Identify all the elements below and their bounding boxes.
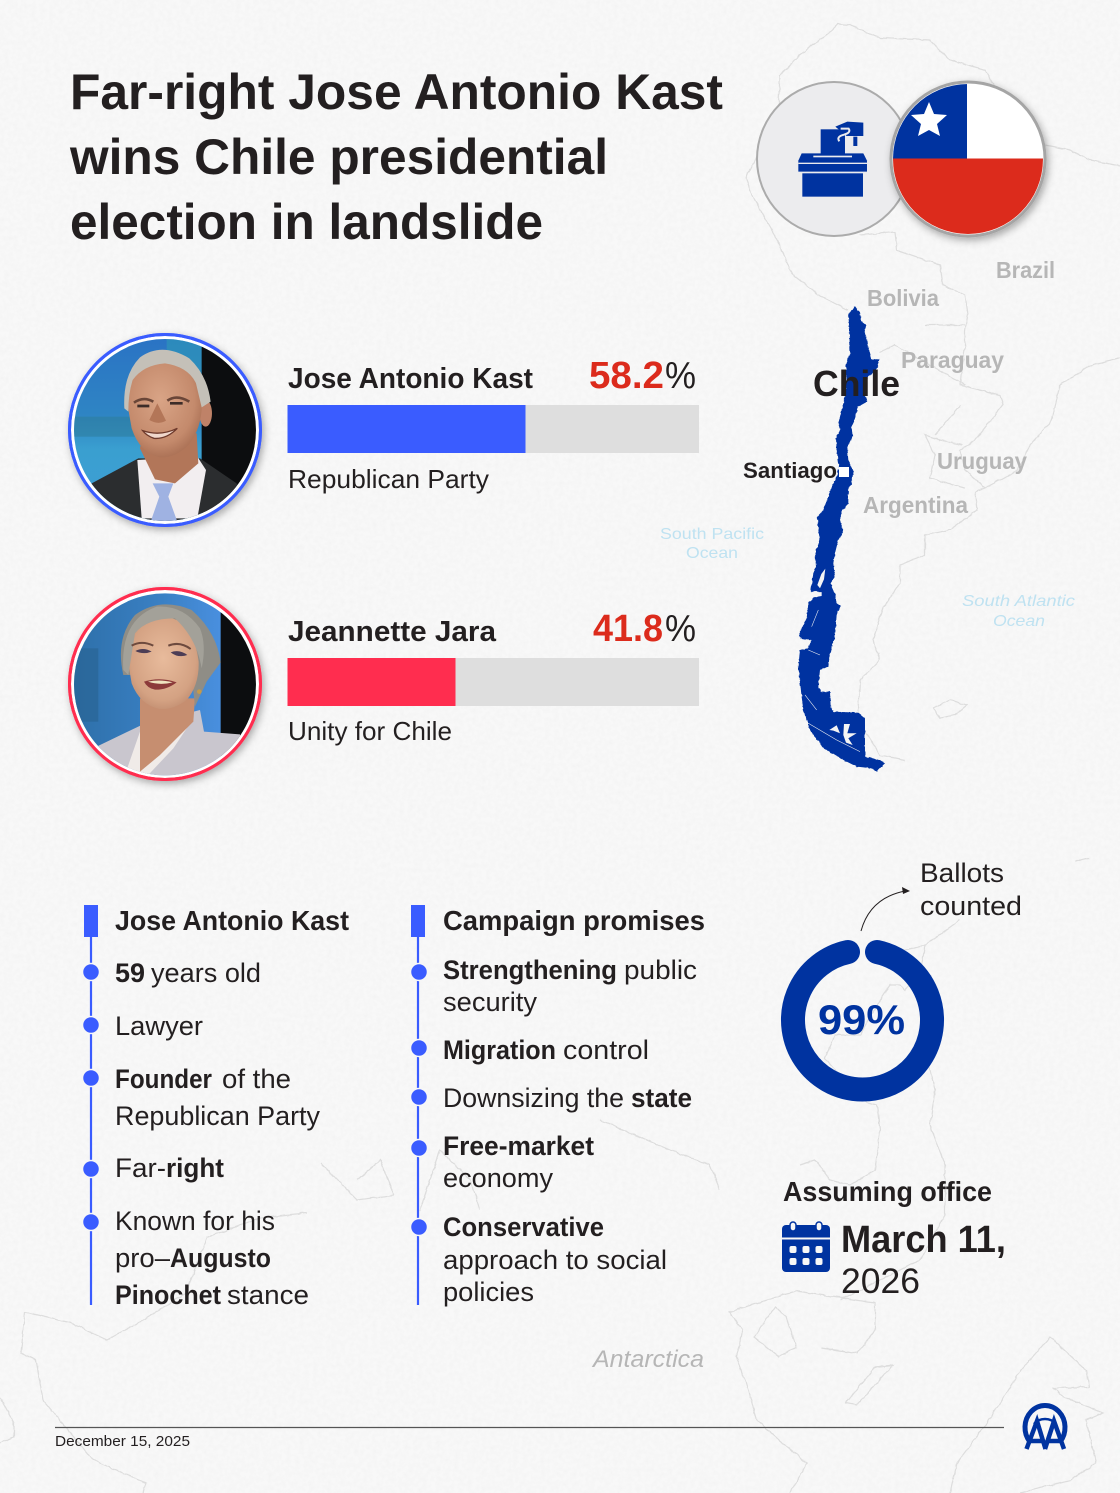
date: March 11, 2026: 2026 (841, 1262, 920, 1301)
candidate result: Jeannette Jara: Jeannette Jara (288, 616, 497, 648)
panel: Kast profile timeline: Republican Party (115, 1101, 320, 1131)
panel: Kast profile timeline: stance (227, 1280, 309, 1310)
callout: ballots counted label (920, 858, 1022, 921)
map labels: oceans: South Pacific (660, 526, 764, 543)
title (69, 64, 723, 250)
title: election in landslide (70, 194, 543, 250)
map labels: oceans (660, 526, 1075, 630)
panel: Kast profile timeline: Lawyer (115, 1011, 203, 1041)
panel: campaign promises timeline: policies (443, 1277, 534, 1307)
panel: Kast profile timeline: Known for his (115, 1206, 275, 1236)
icon: Chilean flag (890, 80, 1046, 238)
panel: campaign promises timeline: economy (443, 1163, 553, 1193)
callout: ballots counted label: Ballots (920, 858, 1004, 888)
map: Chile (798, 307, 885, 772)
panel: campaign promises timeline: Migration (443, 1035, 556, 1065)
candidate result: Jose Antonio Kast (288, 355, 699, 494)
panel: Kast profile timeline (82, 905, 349, 1310)
panel: campaign promises timeline: approach to social (443, 1245, 667, 1275)
panel: campaign promises timeline: Strengthening (443, 955, 617, 985)
map label: Antarctica: Antarctica (591, 1346, 704, 1373)
title: Far-right Jose Antonio Kast (70, 64, 723, 120)
portrait: Jose Antonio Kast (70, 333, 262, 533)
panel: Kast profile timeline: years old (151, 958, 261, 988)
panel: campaign promises timeline: Campaign promises (443, 905, 705, 936)
panel: Kast profile timeline: 59 (115, 958, 145, 988)
map labels: oceans: Ocean (686, 545, 738, 562)
panel: Kast profile timeline: Pinochet (115, 1280, 221, 1310)
map labels: oceans: Ocean (993, 613, 1045, 630)
panel: campaign promises timeline (410, 905, 705, 1307)
heading: assuming office: Assuming office (783, 1176, 992, 1207)
map labels: countries: Brazil (996, 257, 1055, 283)
panel: Kast profile timeline: pro– (115, 1243, 170, 1273)
panel: campaign promises timeline: state (631, 1083, 692, 1113)
panel: campaign promises timeline: control (563, 1035, 649, 1065)
date: March 11, 2026 (841, 1219, 1006, 1301)
candidate result: Jeannette Jara (288, 608, 699, 746)
panel: campaign promises timeline: security (443, 987, 537, 1017)
panel: Kast profile timeline: Far- (115, 1153, 166, 1183)
candidate result: Jeannette Jara: 41.8 (593, 608, 663, 650)
icon: calendar (782, 1222, 830, 1272)
map labels: countries: Uruguay (937, 448, 1027, 474)
panel: campaign promises timeline: Conservative (443, 1212, 604, 1242)
candidate result: Jose Antonio Kast: % (665, 355, 696, 397)
date: March 11, 2026: March 11, (841, 1219, 1006, 1261)
title: wins Chile presidential (69, 129, 608, 185)
logo: Anadolu Agency AA (1025, 1405, 1065, 1449)
map labels: oceans: South Atlantic (962, 593, 1075, 610)
panel: Kast profile timeline: of the (222, 1064, 291, 1094)
panel: Kast profile timeline: Founder (115, 1064, 212, 1094)
map labels: countries: Paraguay (901, 347, 1004, 373)
panel: campaign promises timeline: Downsizing the (443, 1083, 624, 1113)
map label: Santiago: Santiago (743, 458, 837, 483)
candidate result: Jose Antonio Kast: Jose Antonio Kast (288, 363, 533, 395)
icon: ballot box in circle (757, 82, 911, 236)
panel: campaign promises timeline: public (624, 955, 697, 985)
donut chart: 99 percent ballots counted (793, 952, 932, 1089)
donut chart: 99 percent ballots counted: 99% (818, 996, 905, 1043)
map labels: countries (863, 257, 1055, 518)
map labels: countries: Argentina (863, 492, 968, 518)
map labels: countries: Bolivia (867, 285, 939, 311)
panel: Kast profile timeline: Jose Antonio Kast (115, 905, 349, 936)
arrow: from donut to ballots label (861, 887, 910, 931)
map label: Chile: Chile (813, 363, 900, 404)
portrait: Jeannette Jara (70, 588, 262, 788)
candidate result: Jeannette Jara: % (665, 608, 696, 650)
panel: Kast profile timeline: Augusto (170, 1243, 271, 1273)
footer date: December 15, 2025 (55, 1434, 190, 1450)
panel: campaign promises timeline: Free-market (443, 1131, 594, 1161)
panel: Kast profile timeline: right (166, 1153, 224, 1183)
candidate result: Jeannette Jara: Unity for Chile (288, 716, 452, 746)
candidate result: Jose Antonio Kast: Republican Party (288, 464, 489, 494)
candidate result: Jose Antonio Kast: 58.2 (589, 355, 664, 397)
footer rule (55, 1426, 1004, 1428)
callout: ballots counted label: counted (920, 891, 1022, 921)
